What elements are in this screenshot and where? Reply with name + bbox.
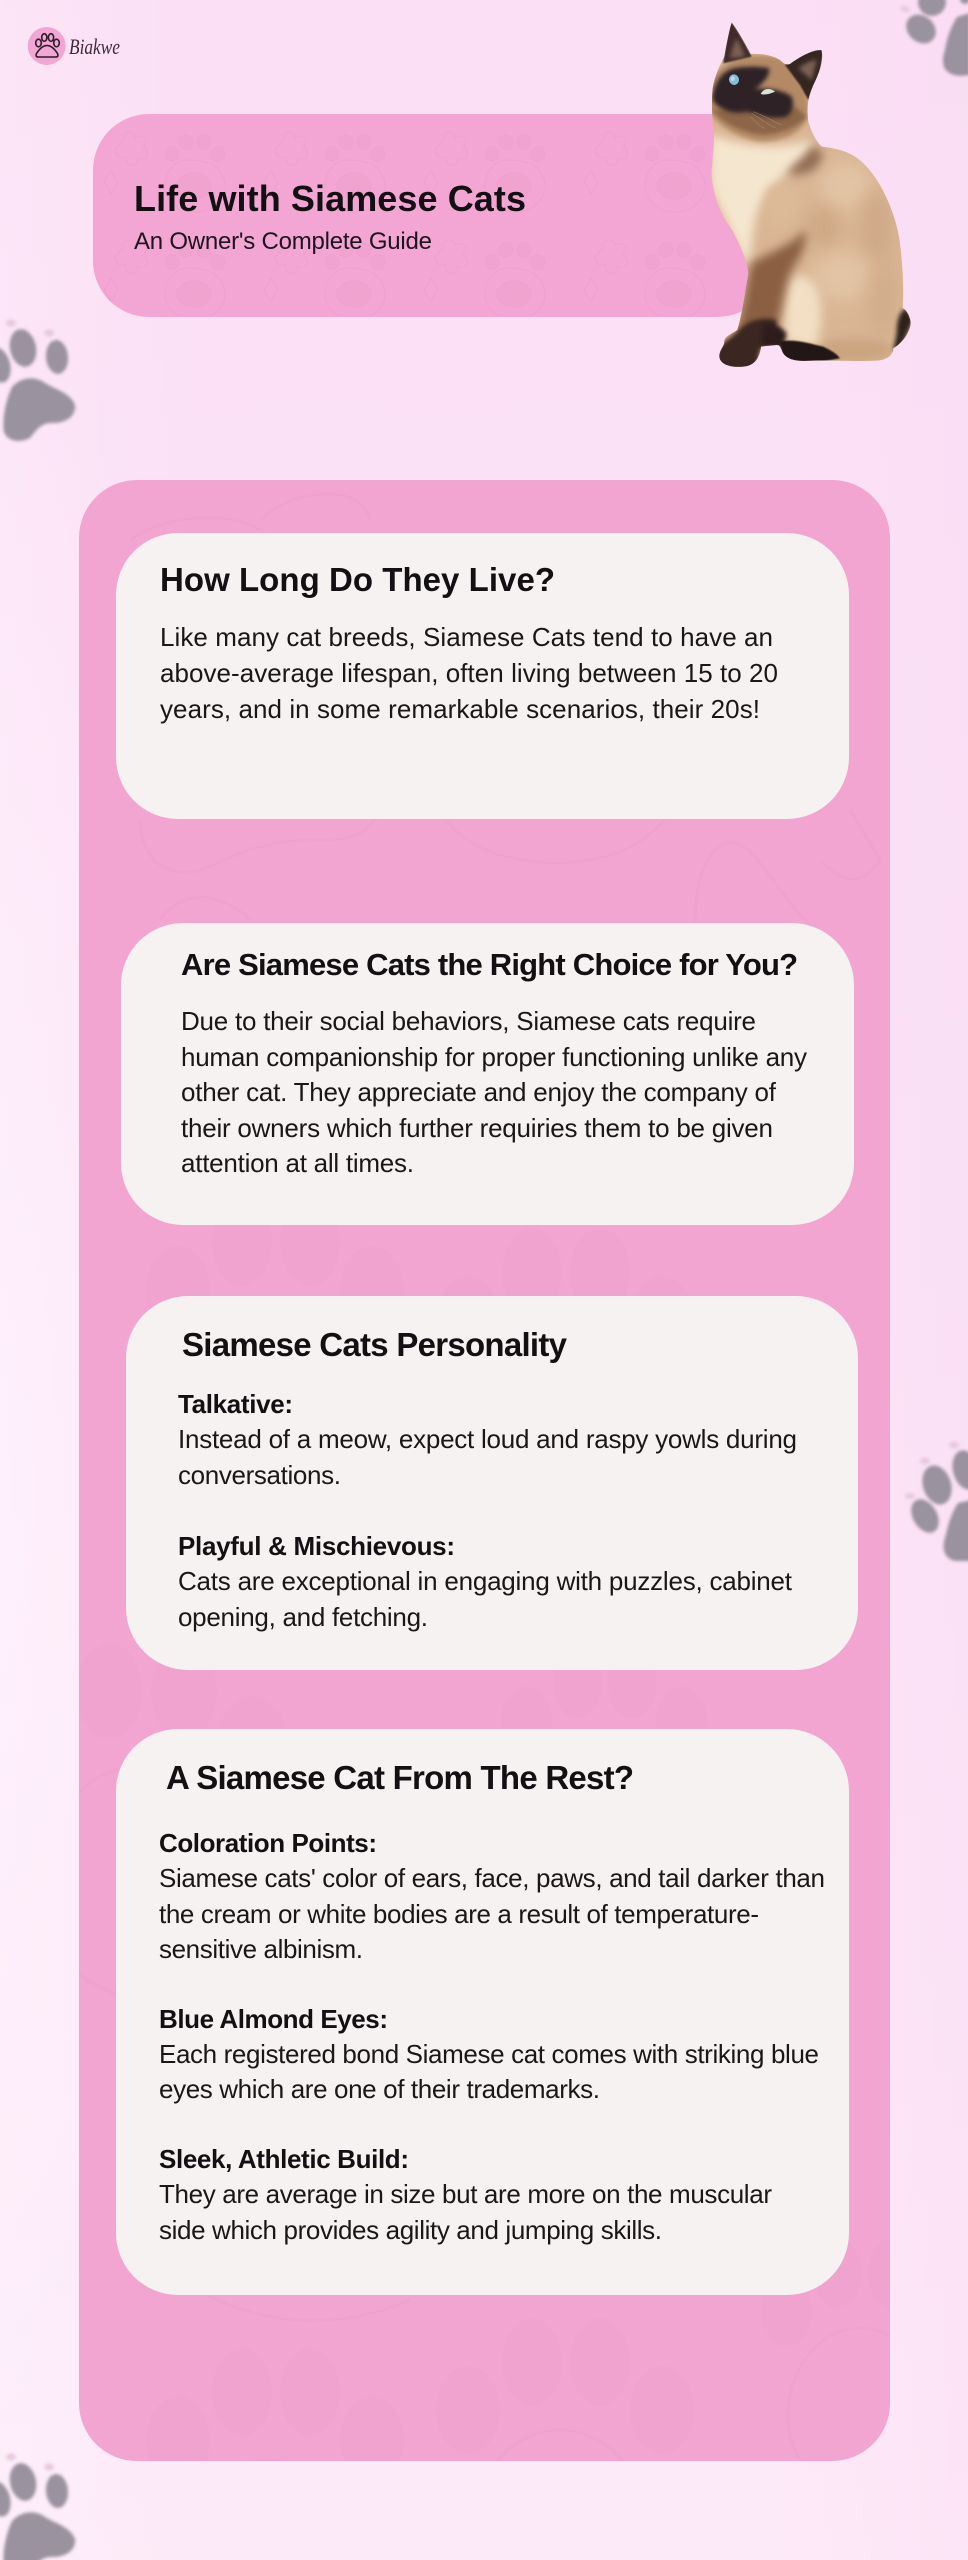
body text: years, and in some remarkable scenarios, their 20s! — [160, 694, 760, 724]
body text: above-average lifespan, often living between 15 to 20 — [160, 658, 778, 688]
trait: talkative: Instead of a meow, expect loud and raspy yowls during — [178, 1424, 797, 1454]
cat whiskers — [751, 112, 782, 128]
trait: sleek athletic build: They are average in size but are more on the muscular — [159, 2179, 772, 2209]
body text: their owners which further requiries them to be given — [181, 1113, 773, 1143]
card: Are Siamese Cats the Right Choice for You? — [121, 923, 854, 1225]
trait: coloration points: the cream or white bodies are a result of temperature- — [159, 1899, 759, 1929]
body text: other cat. They appreciate and enjoy the company of — [181, 1077, 777, 1107]
heading: A Siamese Cat From The Rest? — [166, 1759, 634, 1796]
card: Siamese Cats Personality — [126, 1296, 858, 1670]
trait: coloration points: sensitive albinism. — [159, 1934, 363, 1964]
icon: paw badge — [28, 27, 66, 65]
trait: talkative: Talkative: — [178, 1389, 293, 1419]
cat eyes — [727, 73, 775, 95]
illustration: siamese cat — [707, 17, 917, 370]
trait: blue almond eyes — [159, 2004, 819, 2104]
heading: Are Siamese Cats the Right Choice for You? — [181, 947, 798, 982]
card: How Long Do They Live? — [116, 533, 849, 819]
trait: sleek athletic build — [159, 2144, 772, 2245]
trait: coloration points: Siamese cats' color of ears, face, paws, and tail darker than — [159, 1863, 825, 1893]
body text: Like many cat breeds, Siamese Cats tend to have an — [160, 622, 773, 652]
trait: playful: Cats are exceptional in engaging with puzzles, cabinet — [178, 1566, 793, 1596]
trait: blue almond eyes: Blue Almond Eyes: — [159, 2004, 388, 2034]
body text — [181, 1006, 807, 1178]
trait: sleek athletic build: side which provides agility and jumping skills. — [159, 2215, 662, 2245]
body text — [160, 622, 778, 724]
trait: coloration points: Coloration Points: — [159, 1828, 377, 1858]
heading: How Long Do They Live? — [160, 561, 555, 598]
heading: Siamese Cats Personality — [182, 1326, 568, 1363]
title: Life with Siamese Cats — [134, 178, 526, 219]
trait: playful — [178, 1531, 793, 1632]
body text: attention at all times. — [181, 1148, 414, 1178]
logo: Biakwe — [28, 27, 120, 65]
decorative paw: top right — [899, 0, 968, 76]
logo wordmark: Biakwe — [69, 34, 120, 59]
panel: main content background — [79, 480, 890, 2461]
trait: talkative: conversations. — [178, 1460, 341, 1490]
decorative paw: left — [0, 320, 75, 441]
body text: Due to their social behaviors, Siamese cats require — [181, 1006, 756, 1036]
body text: human companionship for proper functioning unlike any — [181, 1042, 807, 1072]
decorative paw: right — [905, 1442, 968, 1561]
trait: coloration points — [159, 1828, 825, 1964]
trait: sleek athletic build: Sleek, Athletic Build: — [159, 2144, 409, 2174]
decorative paw: bottom left — [0, 2454, 75, 2560]
trait: playful: Playful & Mischievous: — [178, 1531, 455, 1561]
subtitle: An Owner's Complete Guide — [134, 228, 432, 255]
trait: playful: opening, and fetching. — [178, 1602, 428, 1632]
card: A Siamese Cat From The Rest? — [116, 1729, 849, 2295]
trait: talkative — [178, 1389, 797, 1490]
trait: blue almond eyes: eyes which are one of their trademarks. — [159, 2074, 600, 2104]
panel: title banner — [93, 114, 773, 317]
trait: blue almond eyes: Each registered bond Siamese cat comes with striking blue — [159, 2039, 819, 2069]
